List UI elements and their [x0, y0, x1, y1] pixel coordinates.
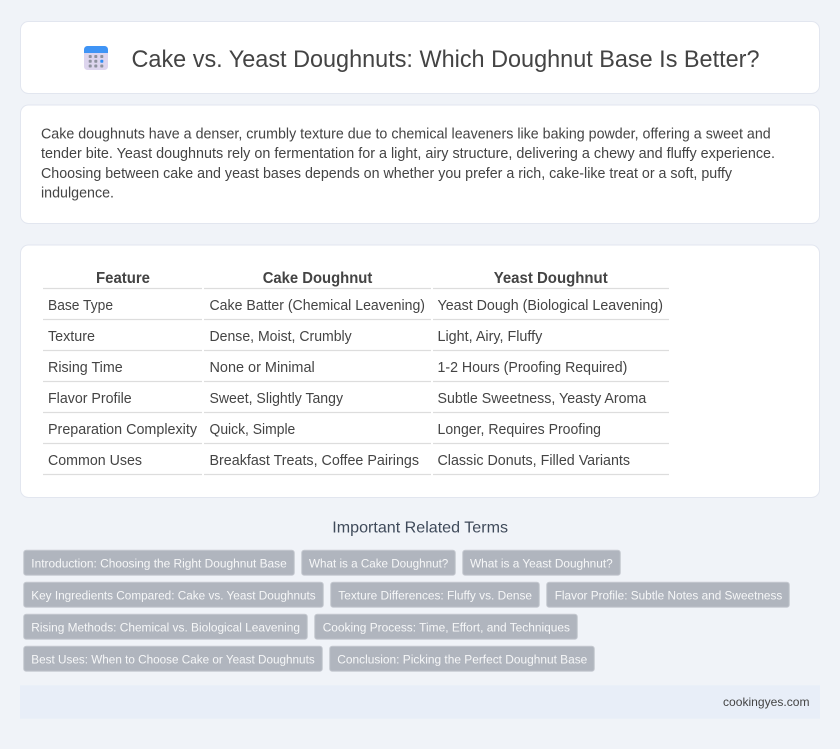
intro paragraph: Choosing between cake and yeast bases depends on whether you prefer a rich, cake-like treat or a soft, puffy: [41, 166, 733, 182]
row: base type: Base Type: [48, 298, 113, 314]
tag: rising methods: Rising Methods: Chemical vs. Biological Leavening: [31, 620, 300, 634]
tag: cooking process: [315, 614, 577, 639]
tag: rising methods: [24, 614, 307, 639]
tag: yeast doughnut: [463, 550, 620, 575]
row: flavor profile: Subtle Sweetness, Yeasty Aroma: [438, 391, 647, 407]
row: texture: Dense, Moist, Crumbly: [210, 329, 352, 345]
row: preparation complexity: Longer, Requires Proofing: [438, 422, 601, 438]
intro paragraph: [41, 126, 775, 202]
tag: cake doughnut: What is a Cake Doughnut?: [309, 556, 448, 570]
row: texture: Texture: [48, 329, 95, 345]
panel: comparison table: [20, 245, 820, 498]
tag: texture differences: [331, 582, 539, 607]
intro paragraph: tender bite. Yeast doughnuts rely on fermentation for a light, airy structure, delivering a chewy and fluffy experience.: [41, 146, 775, 162]
table header row: Cake Doughnut: [263, 270, 372, 287]
row: base type: [48, 298, 663, 314]
row: preparation complexity: Quick, Simple: [210, 422, 295, 438]
row: flavor profile: [48, 391, 647, 407]
row: rising time: 1-2 Hours (Proofing Required): [438, 360, 627, 376]
row: common uses: Breakfast Treats, Coffee Pairings: [210, 453, 419, 469]
row: common uses: [48, 453, 630, 469]
tag: best uses: Best Uses: When to Choose Cake or Yeast Doughnuts: [31, 652, 315, 666]
table header row: [96, 270, 608, 287]
row: flavor profile: Flavor Profile: [48, 391, 132, 407]
table header row: Feature: [96, 270, 150, 287]
intro paragraph: Cake doughnuts have a denser, crumbly texture due to chemical leaveners like baking powder, offering a sweet and: [41, 126, 771, 142]
tag: cake doughnut: [302, 550, 455, 575]
tag: best uses: [24, 646, 322, 671]
row: rising time: None or Minimal: [210, 360, 315, 376]
tag: flavor profile: Flavor Profile: Subtle Notes and Sweetness: [555, 588, 782, 602]
row: preparation complexity: [48, 422, 601, 438]
tag: key ingredients: [24, 582, 323, 607]
tag: cooking process: Cooking Process: Time, Effort, and Techniques: [323, 620, 570, 634]
panel: header: [20, 22, 820, 94]
tag: conclusion: [330, 646, 594, 671]
related term tags: [24, 550, 789, 671]
row: preparation complexity: Preparation Complexity: [48, 422, 198, 438]
tag: yeast doughnut: What is a Yeast Doughnut?: [470, 556, 613, 570]
footer: [20, 685, 820, 719]
tag: key ingredients: Key Ingredients Compared: Cake vs. Yeast Doughnuts: [31, 588, 316, 602]
tag: introduction: Introduction: Choosing the Right Doughnut Base: [31, 556, 287, 570]
tag: flavor profile: [547, 582, 789, 607]
row: common uses: Classic Donuts, Filled Variants: [438, 453, 630, 469]
row: texture: Light, Airy, Fluffy: [438, 329, 543, 345]
heading: important related terms: Important Related Terms: [332, 520, 508, 537]
panel: introduction: [20, 105, 820, 224]
footer source text: cookingyes.com: [723, 695, 810, 709]
row: flavor profile: Sweet, Slightly Tangy: [210, 391, 344, 407]
tag: conclusion: Conclusion: Picking the Perfect Doughnut Base: [337, 652, 587, 666]
tag: texture differences: Texture Differences: Fluffy vs. Dense: [338, 588, 532, 602]
row: rising time: [48, 360, 627, 376]
row: common uses: Common Uses: [48, 453, 142, 469]
table header row: Yeast Doughnut: [494, 270, 608, 287]
row: base type: Cake Batter (Chemical Leavening): [210, 298, 425, 314]
row: texture: [48, 329, 543, 345]
tag: introduction: [24, 550, 294, 575]
icon: calendar: [84, 46, 108, 70]
row: rising time: Rising Time: [48, 360, 123, 376]
title: Cake vs. Yeast Doughnuts: Which Doughnut Base Is Better?: [132, 46, 760, 73]
intro paragraph: indulgence.: [41, 186, 114, 202]
row: base type: Yeast Dough (Biological Leavening): [438, 298, 663, 314]
